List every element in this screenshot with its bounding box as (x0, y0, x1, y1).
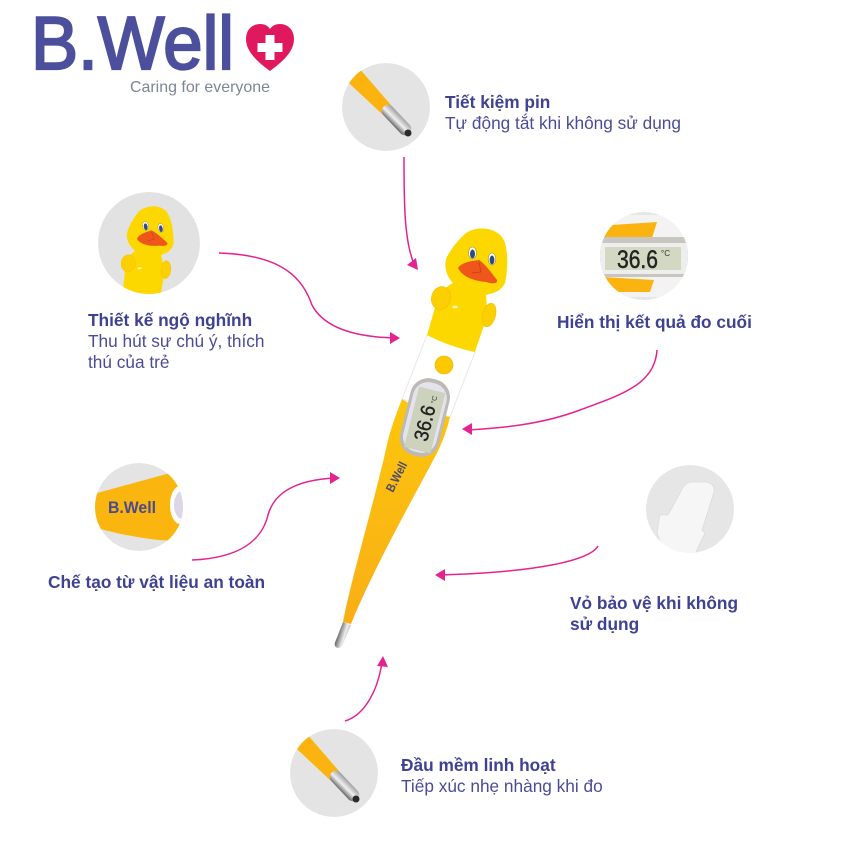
feature text: safe material: Chế tạo từ vật liệu an toàn (48, 572, 265, 592)
thermometer display: °C (430, 395, 439, 405)
thermometer white section (402, 335, 475, 417)
logo wordmark: B.Well (31, 1, 234, 85)
feature text: battery saving: Tự động tắt khi không sử dụng (445, 113, 681, 133)
icon: circle thermometer tip (battery saving) (336, 60, 430, 151)
thermometer yellow body (343, 399, 450, 624)
arrow: to duck head top (404, 157, 418, 270)
thermometer display (396, 374, 454, 461)
feature text: fun design (88, 310, 264, 372)
feature text: battery saving: Tiết kiệm pin (445, 92, 550, 112)
feature text: battery saving (445, 92, 681, 133)
icon: circle protective cap (646, 465, 734, 556)
icon: circle LCD display (598, 212, 690, 300)
feature text: soft tip: Đầu mềm linh hoạt (401, 755, 556, 775)
icon: circle soft tip (284, 726, 378, 817)
icon: circle LCD display: 36.6 (617, 246, 658, 274)
icon: circle B.Well body: B.Well (108, 498, 156, 517)
feature text: fun design: Thiết kế ngộ nghĩnh (88, 310, 252, 330)
icon: circle B.Well body (95, 463, 183, 551)
feature text: soft tip: Tiếp xúc nhẹ nhàng khi đo (401, 776, 603, 796)
logo tagline: Caring for everyone (130, 79, 270, 96)
arrow: body material (192, 472, 340, 560)
thermometer duck head (427, 228, 507, 352)
icon: circle LCD display: °C (661, 249, 670, 258)
arrow: display (462, 350, 657, 435)
feature text: soft tip (401, 755, 603, 796)
icon: heart with cross (246, 24, 294, 71)
logo: B.Well (31, 1, 294, 96)
feature text: protective cap: Vỏ bảo vệ khi không (570, 593, 738, 613)
icon: circle duck head (98, 192, 200, 305)
arrow: soft tip (345, 656, 388, 721)
feature text: fun design: Thu hút sự chú ý, thích (88, 331, 264, 351)
thermometer (335, 228, 507, 648)
thermometer button (435, 356, 453, 374)
thermometer brand: B.Well (383, 459, 410, 494)
arrow: fun design (219, 253, 400, 344)
feature text: protective cap: sử dụng (570, 614, 639, 634)
feature text: final reading: Hiển thị kết quả đo cuối (557, 312, 752, 332)
feature text: fun design: thú của trẻ (88, 352, 170, 372)
arrow: cap (435, 546, 598, 581)
thermometer display: 36.6 (410, 403, 441, 443)
thermometer metal tip (335, 622, 351, 648)
feature text: protective cap (570, 593, 738, 634)
